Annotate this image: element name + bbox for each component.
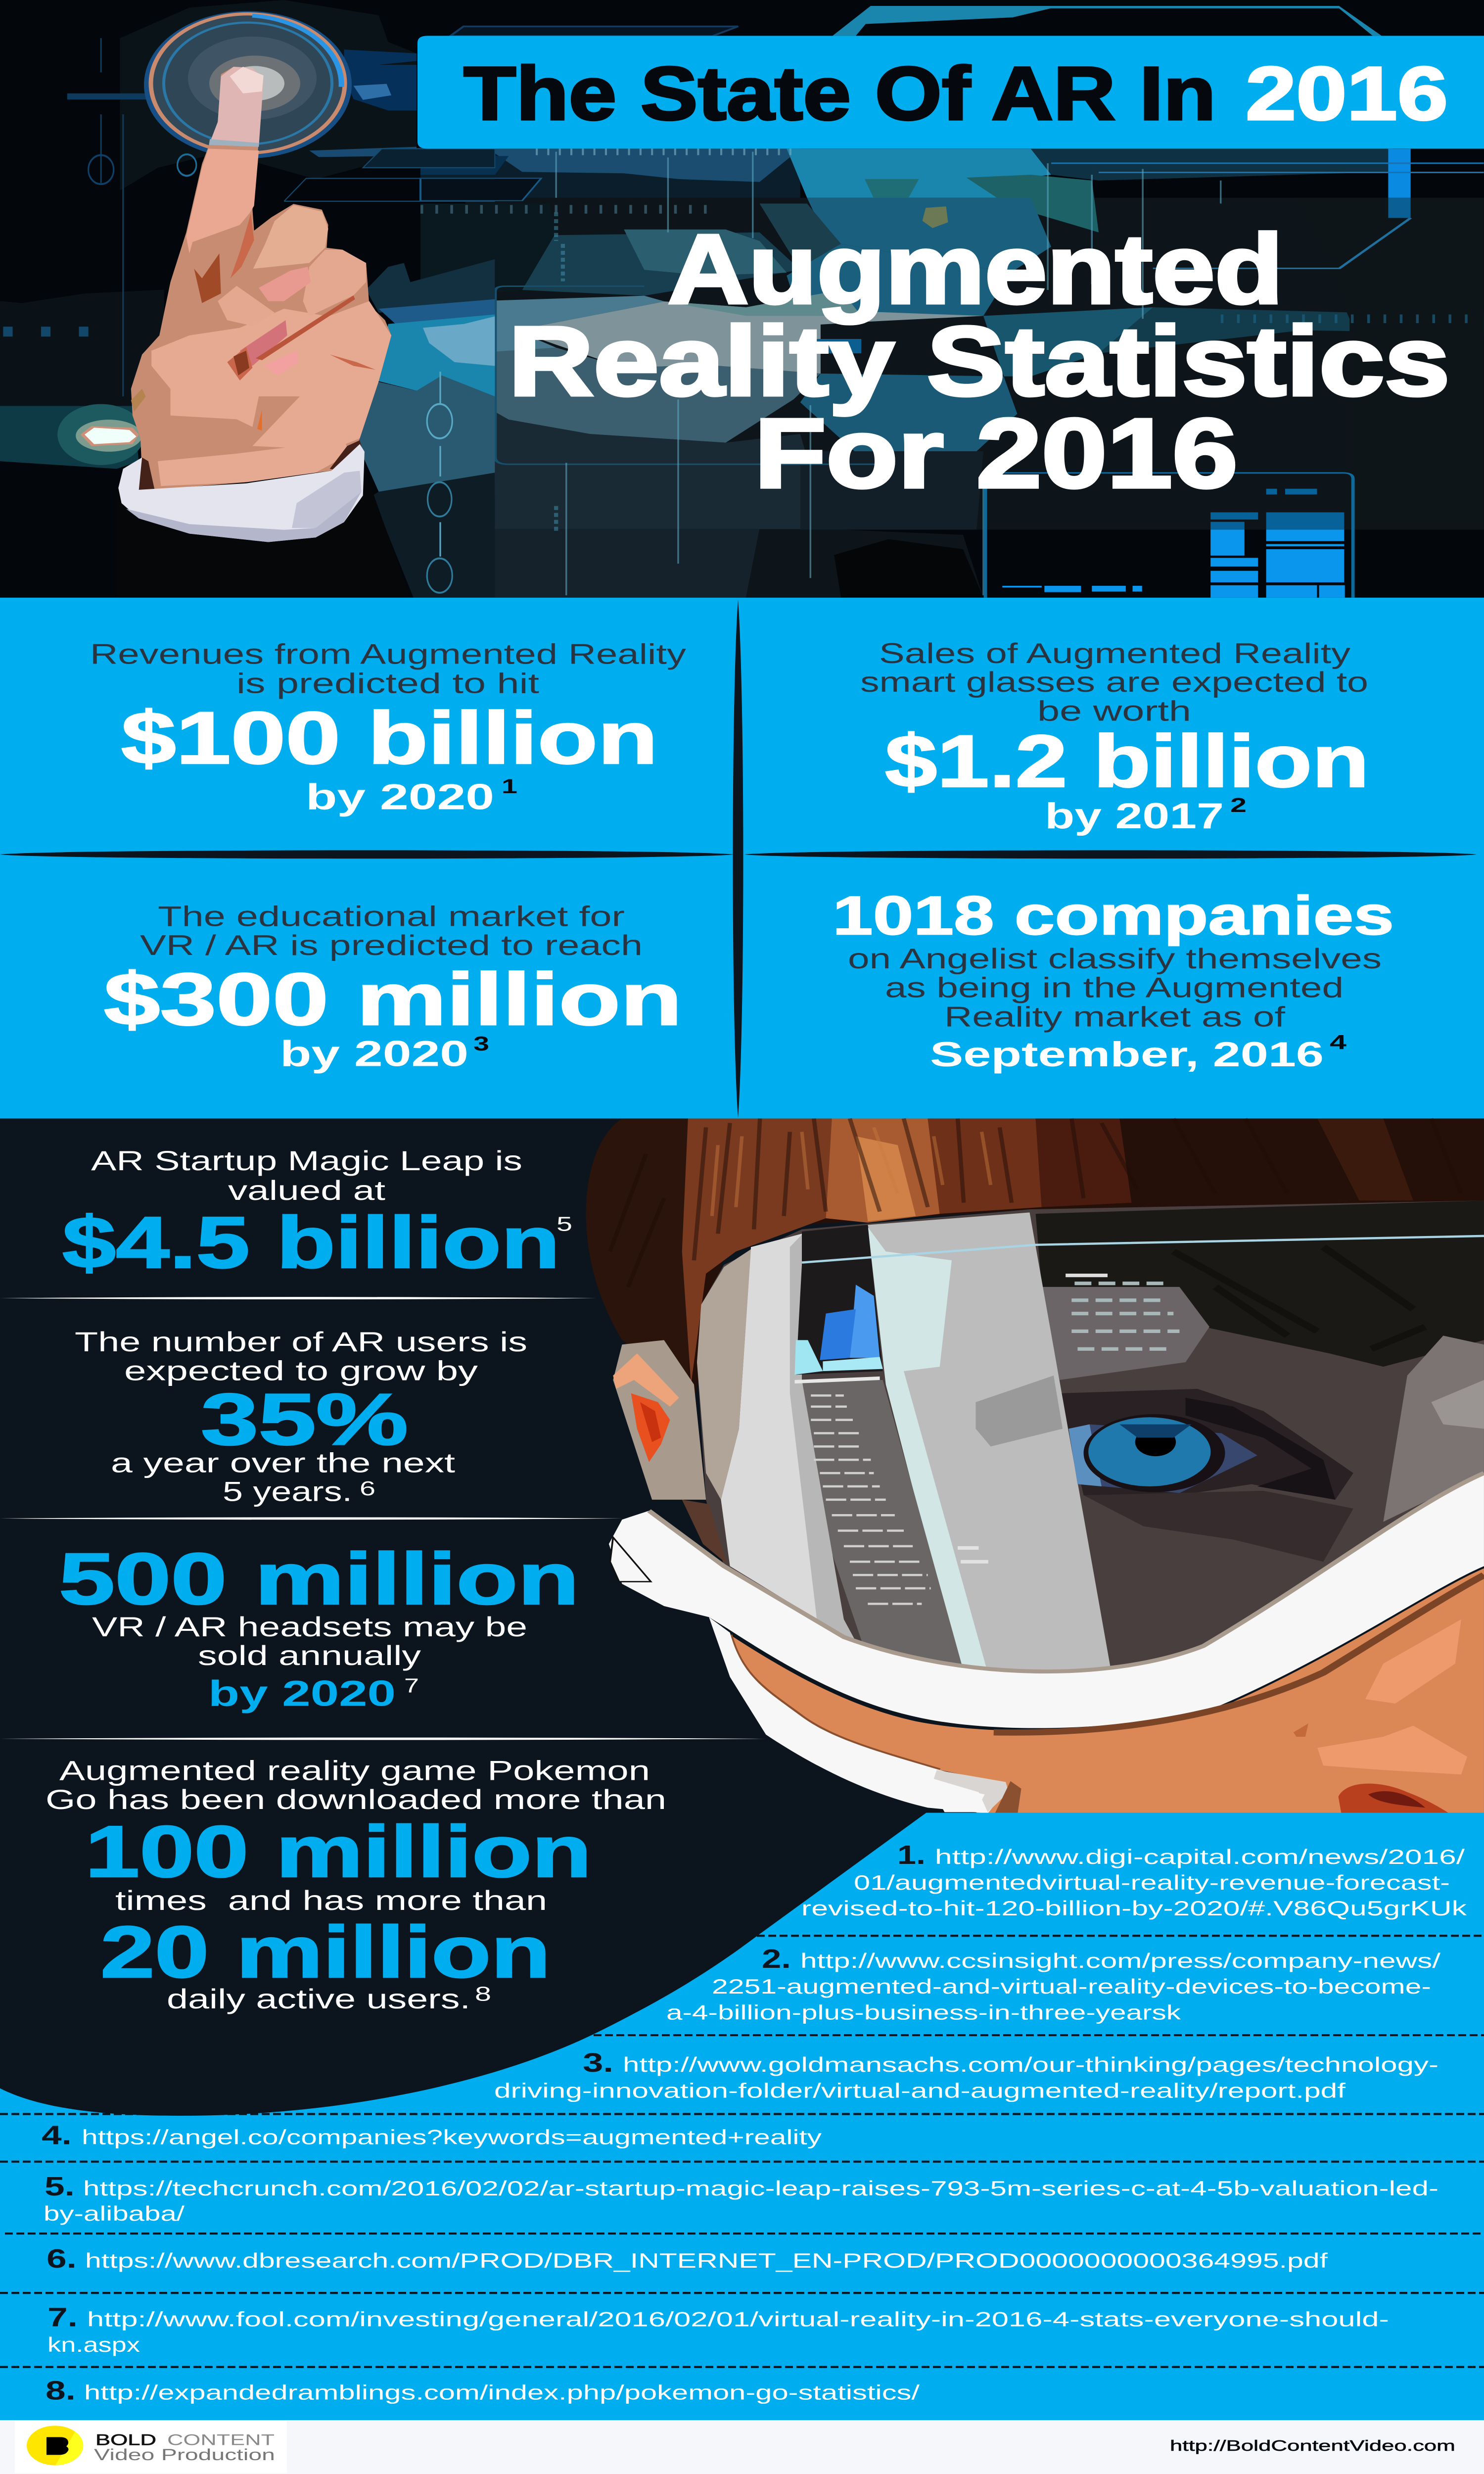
stat: 1018 companies: on Angelist classify themselves bbox=[848, 943, 1382, 975]
stat: $100 billion revenues: by 2020 bbox=[306, 777, 494, 817]
stat: $1.2 billion smart glasses: by 2017 bbox=[1045, 796, 1224, 836]
white visor strap bbox=[609, 1473, 1484, 1728]
source 1 bbox=[801, 1840, 1467, 1920]
source 3: driving-innovation-folder/virtual-and-augmented-reality/report.pdf bbox=[494, 2079, 1346, 2102]
stat: $100 billion revenues bbox=[90, 638, 687, 817]
source 1: 01/augmentedvirtual-reality-revenue-forecast- bbox=[854, 1871, 1450, 1894]
nostril bbox=[1339, 1784, 1449, 1813]
source 7: 7. bbox=[47, 2303, 78, 2332]
stat: 1018 companies: 4 bbox=[1330, 1031, 1346, 1053]
hero background: futuristic interface bbox=[0, 0, 1484, 598]
source 6: 6. bbox=[46, 2244, 77, 2273]
source 2 bbox=[666, 1944, 1441, 2024]
source 1: http://www.digi-capital.com/news/2016/ bbox=[935, 1845, 1465, 1868]
stat: Pokemon Go: daily active users. bbox=[167, 1984, 470, 2014]
stat: $100 billion revenues: $100 billion bbox=[121, 697, 658, 779]
stat: AR users growth: 6 bbox=[360, 1477, 375, 1500]
source 2: 2. bbox=[762, 1944, 791, 1973]
stat: 500 million headsets: sold annually bbox=[198, 1641, 421, 1671]
stat: AR users growth: The number of AR users is bbox=[75, 1327, 527, 1357]
stat: Pokemon Go: Augmented reality game Pokemon bbox=[59, 1756, 650, 1786]
stat: $100 billion revenues: is predicted to hit bbox=[236, 667, 539, 699]
title year: 2016: 2016 bbox=[1246, 51, 1448, 136]
source 3: http://www.goldmansachs.com/our-thinking/pages/technology- bbox=[623, 2053, 1438, 2076]
stat: AR users growth: 35% bbox=[201, 1379, 408, 1460]
source 6: https://www.dbresearch.com/PROD/DBR_INTERNET_EN-PROD/PROD0000000000364995.pdf bbox=[85, 2249, 1328, 2272]
logo: Bold Content Video Production: Video Production bbox=[94, 2446, 275, 2464]
source 3: 3. bbox=[583, 2048, 613, 2077]
footer bar bbox=[0, 2420, 1484, 2474]
stat: Pokemon Go: 8 bbox=[475, 1983, 491, 2005]
stat: Magic Leap valuation: 5 bbox=[556, 1213, 572, 1235]
stat: 500 million headsets: 7 bbox=[404, 1674, 419, 1697]
source 1: revised-to-hit-120-billion-by-2020/#.V86Qu5grKUk bbox=[801, 1897, 1467, 1920]
panel: dark stats background bbox=[0, 1119, 1484, 1813]
logo: Bold Content Video Production bbox=[15, 2421, 287, 2473]
stat: AR users growth: a year over the next bbox=[111, 1448, 455, 1478]
source 2: a-4-billion-plus-business-in-three-yearsk bbox=[666, 2000, 1181, 2024]
illustration: face wearing AR visor bbox=[586, 1119, 1484, 1813]
stat: 1018 companies: September, 2016 bbox=[930, 1036, 1324, 1074]
stat: 1018 companies: Reality market as of bbox=[944, 1001, 1285, 1033]
stat: $300 million education: $300 million bbox=[104, 958, 682, 1041]
stat: $300 million education bbox=[104, 901, 682, 1074]
stat: Pokemon Go bbox=[46, 1756, 666, 2014]
source 8: 8. bbox=[46, 2376, 76, 2405]
stat: 1018 companies bbox=[833, 885, 1394, 1074]
source 3 bbox=[494, 2048, 1438, 2102]
panel: blue stats quadrant bbox=[0, 598, 1484, 1119]
source 5 bbox=[44, 2172, 1438, 2225]
source 2: 2251-augmented-and-virtual-reality-devices-to-become- bbox=[712, 1975, 1431, 1998]
icon: glowing touch ring bbox=[144, 11, 352, 158]
stat: $100 billion revenues: Revenues from Augmented Reality bbox=[90, 638, 687, 670]
stat: Pokemon Go: 100 million bbox=[85, 1811, 592, 1893]
stat: 1018 companies: as being in the Augmented bbox=[885, 972, 1344, 1003]
icon: pointing hand with shirt cuff bbox=[117, 67, 410, 598]
stat: AR users growth bbox=[75, 1327, 527, 1507]
stat: 500 million headsets: VR / AR headsets may be bbox=[92, 1612, 527, 1642]
stat: Magic Leap valuation: AR Startup Magic Leap is bbox=[91, 1146, 522, 1176]
footer website link: http://BoldContentVideo.com bbox=[1170, 2437, 1455, 2454]
source 1: 1. bbox=[897, 1840, 926, 1869]
source 5: by-alibaba/ bbox=[44, 2202, 185, 2225]
stat: 1018 companies: 1018 companies bbox=[833, 885, 1394, 946]
stat: 500 million headsets bbox=[59, 1538, 579, 1714]
stat: $1.2 billion smart glasses: Sales of Augmented Reality bbox=[879, 638, 1351, 669]
source 5: 5. bbox=[45, 2172, 75, 2201]
stat: Pokemon Go: 20 million bbox=[100, 1911, 551, 1993]
lower strap bbox=[709, 1617, 1021, 1813]
source 5: https://techcrunch.com/2016/02/02/ar-startup-magic-leap-raises-793-5m-series-c-at-4-5b-valuation-led- bbox=[83, 2177, 1438, 2200]
stat: Magic Leap valuation bbox=[62, 1146, 572, 1283]
source 7: kn.aspx bbox=[47, 2333, 140, 2356]
source 4: https://angel.co/companies?keywords=augmented+reality bbox=[82, 2125, 822, 2149]
dashed separators between sources bbox=[0, 1936, 1484, 2367]
source 7 bbox=[47, 2303, 1389, 2356]
visor lens bbox=[697, 1200, 1484, 1672]
source 4: 4. bbox=[42, 2121, 72, 2150]
stat: 500 million headsets: 500 million bbox=[59, 1538, 579, 1619]
main heading: For 2016 bbox=[754, 398, 1238, 508]
stat: AR users growth: expected to grow by bbox=[124, 1356, 478, 1386]
source 8: http://expandedramblings.com/index.php/pokemon-go-statistics/ bbox=[84, 2381, 920, 2404]
stat: $1.2 billion smart glasses: smart glasses are expected to bbox=[860, 666, 1368, 698]
hair bbox=[586, 1119, 1484, 1402]
stat: $1.2 billion smart glasses bbox=[860, 638, 1369, 836]
stat: $300 million education: VR / AR is predicted to reach bbox=[140, 930, 643, 961]
stat: $1.2 billion smart glasses: 2 bbox=[1230, 794, 1247, 816]
title: The State Of AR In: The State Of AR In bbox=[464, 51, 1216, 136]
stat: Magic Leap valuation: valued at bbox=[228, 1175, 385, 1206]
ear bbox=[613, 1340, 706, 1500]
logo: Bold Content Video Production: CONTENT bbox=[167, 2431, 275, 2449]
stat: AR users growth: 5 years. bbox=[223, 1476, 352, 1507]
stat: $300 million education: The educational market for bbox=[158, 901, 625, 932]
source 7: http://www.fool.com/investing/general/2016/02/01/virtual-reality-in-2016-4-stats-everyone-should- bbox=[87, 2307, 1389, 2331]
stat: $1.2 billion smart glasses: be worth bbox=[1037, 695, 1191, 727]
stat: $100 billion revenues: 1 bbox=[502, 775, 517, 798]
icon: blue eye bbox=[1068, 1414, 1257, 1493]
stat: $300 million education: by 2020 bbox=[280, 1034, 468, 1074]
logo: Bold Content Video Production: BOLD bbox=[95, 2431, 156, 2449]
stat: 500 million headsets: by 2020 bbox=[208, 1673, 396, 1714]
cheek skin bbox=[730, 1569, 1484, 1813]
stat: Pokemon Go: times and has more than bbox=[115, 1886, 547, 1916]
main heading: Augmented bbox=[668, 214, 1283, 324]
stat: $300 million education: 3 bbox=[473, 1032, 489, 1055]
stat: Pokemon Go: Go has been downloaded more than bbox=[46, 1784, 666, 1815]
main heading bbox=[509, 214, 1450, 508]
stat: $1.2 billion smart glasses: $1.2 billion bbox=[885, 720, 1369, 803]
panel: sources background bbox=[0, 1807, 1484, 2420]
title banner bbox=[417, 36, 1484, 149]
source 2: http://www.ccsinsight.com/press/company-news/ bbox=[800, 1949, 1441, 1972]
stat: Magic Leap valuation: $4.5 billion bbox=[62, 1202, 560, 1283]
